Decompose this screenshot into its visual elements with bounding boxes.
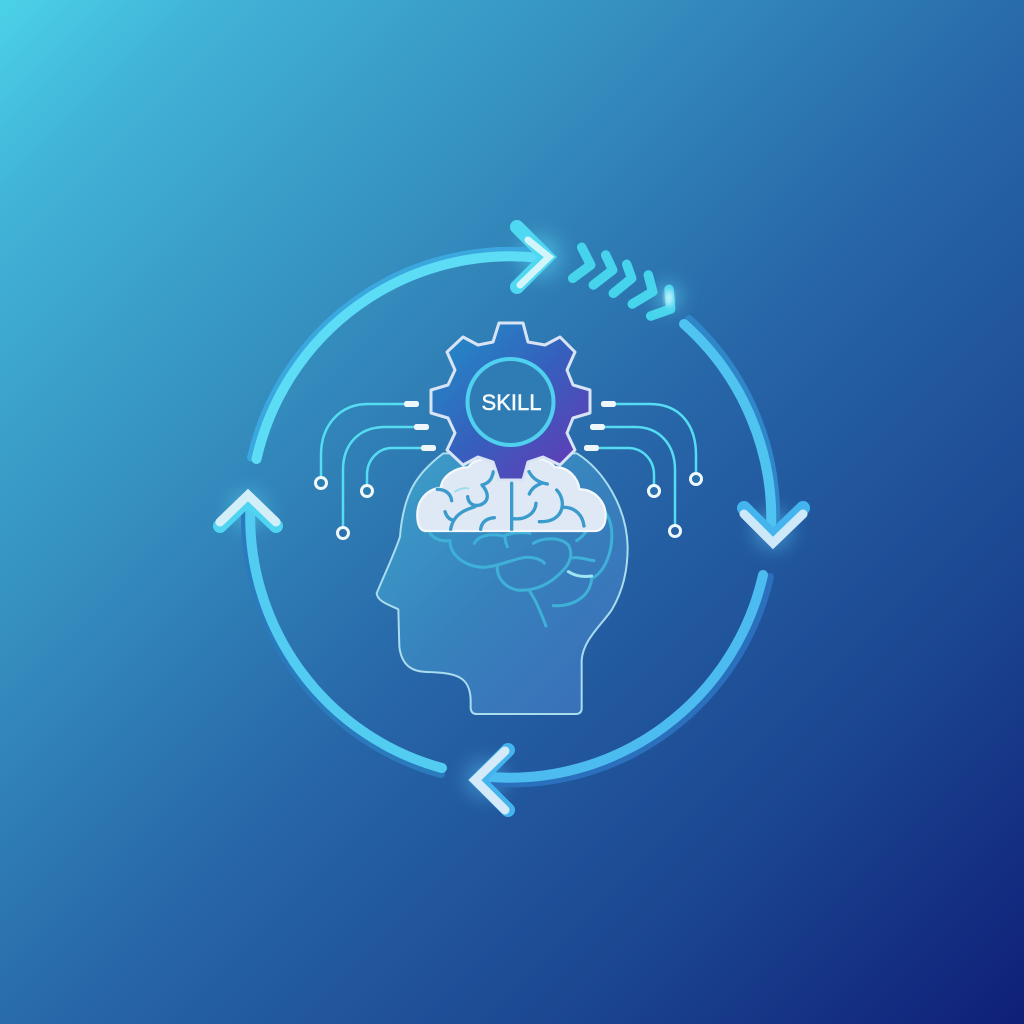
- arc: bottom with arrow: [465, 575, 770, 810]
- trace 3: [584, 445, 660, 496]
- chevrons: progress trail: [573, 247, 682, 316]
- arc: right with arrow: [684, 319, 803, 550]
- head outline: [377, 453, 628, 714]
- gear centre ring: [468, 359, 554, 445]
- trace 3: [362, 445, 436, 496]
- lower brain lines: [430, 513, 612, 626]
- circuit traces left: [316, 401, 436, 538]
- brain folds: [437, 472, 584, 529]
- trace 2: [590, 424, 680, 536]
- arc: top-left with arrow: [251, 227, 562, 459]
- trace 1: [316, 401, 419, 488]
- cycle ring arrows: [220, 227, 803, 810]
- gear label: SKILL: [482, 390, 541, 415]
- head silhouette with lower brain: [377, 453, 628, 714]
- gear badge: [431, 323, 590, 480]
- upper brain panel: [417, 459, 606, 531]
- arc: left with arrow: [220, 490, 442, 774]
- trace 2: [338, 424, 429, 538]
- circuit traces right: [584, 401, 702, 536]
- gear body: [431, 323, 590, 480]
- trace 1: [601, 401, 702, 484]
- brain fill: [417, 459, 606, 531]
